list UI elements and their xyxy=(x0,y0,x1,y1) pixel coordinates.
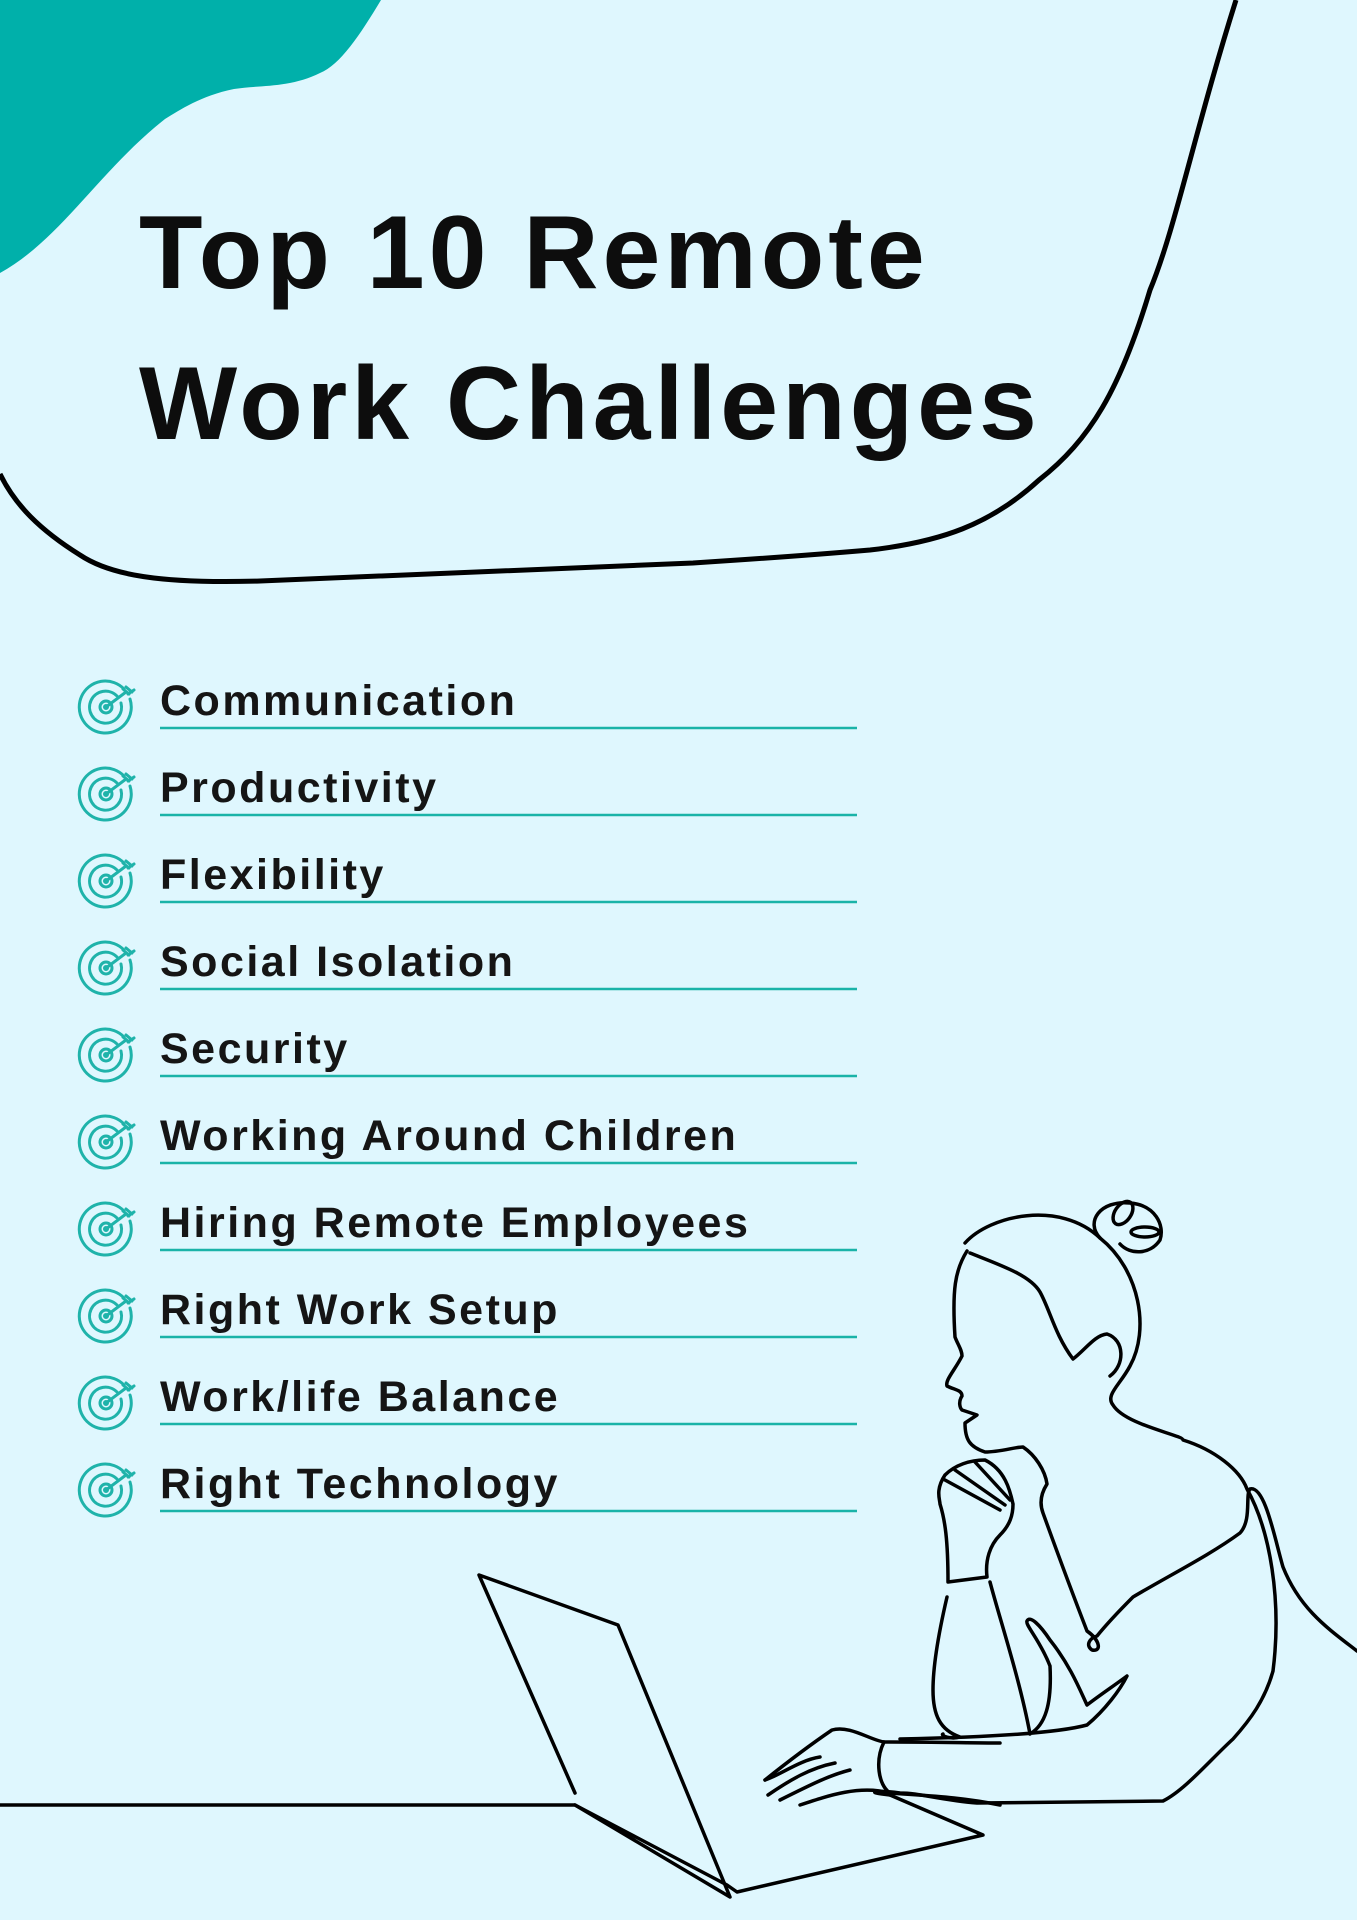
item: Flexibility: Flexibility xyxy=(160,851,386,899)
title: Work Challenges xyxy=(139,346,1041,462)
item: Right Technology xyxy=(79,1460,857,1516)
item: Work/life Balance: Work/life Balance xyxy=(160,1373,560,1421)
title xyxy=(139,195,1041,462)
item: Communication xyxy=(79,677,857,733)
title frame curve xyxy=(0,0,1236,582)
item: Right Technology: Right Technology xyxy=(160,1460,560,1508)
item: Productivity: Productivity xyxy=(160,764,438,812)
item: Work/life Balance xyxy=(79,1373,857,1429)
teal blob xyxy=(0,0,381,273)
item: Right Work Setup: Right Work Setup xyxy=(160,1286,560,1334)
item: Security: Security xyxy=(160,1025,350,1073)
item: Flexibility xyxy=(79,851,857,907)
illustration: woman at laptop xyxy=(0,1198,1357,1897)
item: Social Isolation xyxy=(79,938,857,994)
item: Working Around Children xyxy=(79,1112,857,1168)
item: Working Around Children: Working Around Children xyxy=(160,1112,738,1160)
item: Security xyxy=(79,1025,857,1081)
list of challenges xyxy=(79,677,857,1516)
woman xyxy=(765,1198,1357,1805)
title: Top 10 Remote xyxy=(139,195,929,311)
item: Social Isolation: Social Isolation xyxy=(160,938,515,986)
laptop xyxy=(0,1575,983,1897)
item: Productivity xyxy=(79,764,857,820)
item: Hiring Remote Employees xyxy=(79,1199,857,1255)
item: Communication: Communication xyxy=(160,677,517,725)
item: Hiring Remote Employees: Hiring Remote Employees xyxy=(160,1199,750,1247)
item: Right Work Setup xyxy=(79,1286,857,1342)
